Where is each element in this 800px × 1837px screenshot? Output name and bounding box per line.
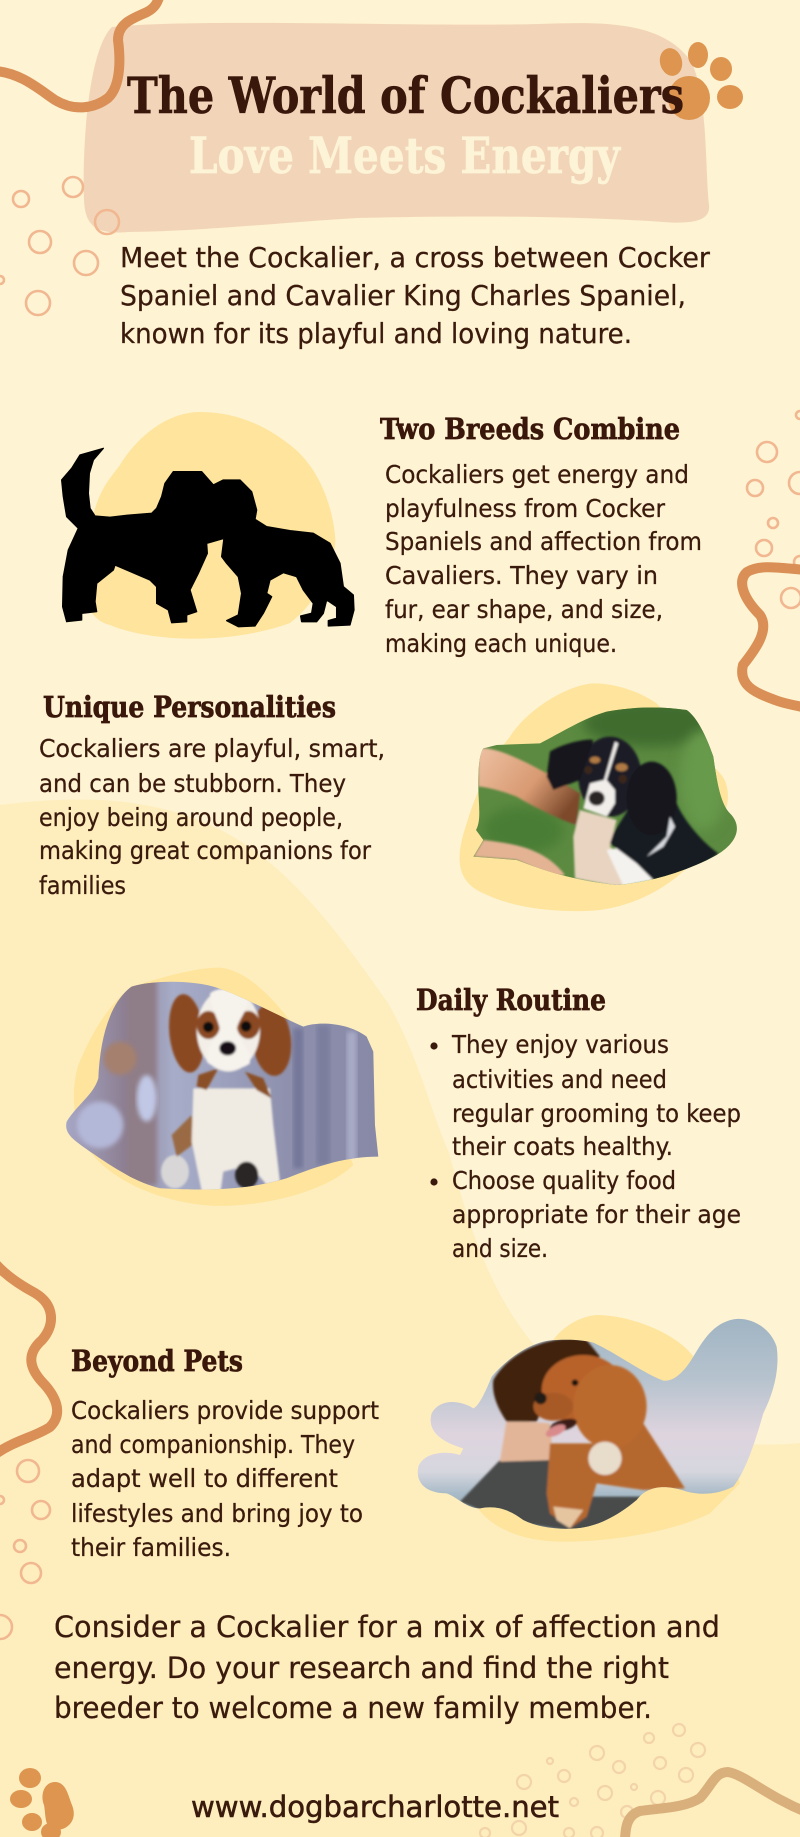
closing text: breeder to welcome a new family member.	[54, 1691, 652, 1725]
yellow blob behind photo	[477, 1315, 740, 1542]
body text: Cockaliers are playful, smart,	[39, 734, 385, 763]
decorative rings lower left	[0, 1460, 50, 1639]
heading: Unique Personalities	[43, 690, 336, 724]
yellow blob behind photo	[74, 968, 353, 1206]
body text: adapt well to different	[71, 1464, 338, 1493]
yellow blob behind photo	[460, 683, 728, 911]
body text	[39, 734, 385, 900]
subtitle: Love Meets Energy	[189, 126, 622, 185]
decorative squiggle top left	[0, 0, 160, 107]
large pale yellow background shape	[0, 800, 800, 1837]
body text: fur, ear shape, and size,	[385, 595, 663, 624]
closing text: Consider a Cockalier for a mix of affection and	[54, 1610, 720, 1644]
decorative rings top left	[0, 177, 119, 315]
bullet list	[430, 1030, 741, 1263]
decorative rings right	[747, 411, 800, 608]
icon: paw print top right	[657, 42, 743, 120]
body text	[71, 1396, 379, 1562]
closing text	[54, 1610, 720, 1725]
decorative rings bottom right	[480, 1724, 705, 1837]
bullet list: Choose quality food	[452, 1166, 676, 1195]
title: The World of Cockaliers	[127, 66, 684, 125]
decorative squiggle left	[0, 1262, 57, 1455]
bullet list: They enjoy various	[451, 1030, 669, 1059]
body text: and can be stubborn. They	[39, 769, 346, 798]
body text: Spaniels and affection from	[385, 527, 702, 556]
body text: and companionship. They	[71, 1430, 355, 1459]
body text: enjoy being around people,	[39, 803, 343, 832]
body text: Cockaliers get energy and	[385, 460, 689, 489]
panel: unique personalities	[39, 683, 747, 911]
closing text: energy. Do your research and find the right	[54, 1651, 669, 1685]
body text: making great companions for	[39, 836, 372, 865]
panel: two breeds combine	[62, 412, 702, 658]
body text: Cavaliers. They vary in	[385, 561, 658, 590]
bullet list: and size.	[452, 1234, 548, 1263]
panel: beyond pets	[71, 1313, 785, 1562]
body text: their families.	[71, 1533, 231, 1562]
icon: two dog silhouettes	[62, 448, 354, 627]
body text: families	[39, 871, 126, 900]
body text: lifestyles and bring joy to	[71, 1499, 363, 1528]
bullet list: their coats healthy.	[452, 1132, 673, 1161]
intro text: known for its playful and loving nature.	[120, 317, 632, 350]
decorative squiggle right	[742, 567, 800, 708]
icon: paw print bottom left	[10, 1768, 74, 1837]
body text: playfulness from Cocker	[385, 494, 666, 523]
bullet list: activities and need	[452, 1065, 667, 1094]
decorative squiggle bottom right	[625, 1772, 800, 1837]
intro text	[120, 241, 711, 350]
intro text: Meet the Cockalier, a cross between Cocker	[120, 241, 711, 274]
body text: Cockaliers provide support	[71, 1396, 379, 1425]
panel: daily routine	[60, 968, 741, 1263]
intro text: Spaniel and Cavalier King Charles Spaniel,	[120, 279, 686, 312]
bullet list: appropriate for their age	[452, 1200, 741, 1229]
photo: cavalier puppy against wood	[60, 975, 385, 1195]
heading: Beyond Pets	[71, 1344, 243, 1378]
yellow blob behind silhouette	[84, 412, 335, 639]
bullet list: regular grooming to keep	[452, 1099, 741, 1128]
body text	[385, 460, 702, 658]
heading: Daily Routine	[416, 983, 606, 1017]
body text: making each unique.	[385, 629, 617, 658]
photo: man hugging golden puppy	[410, 1313, 785, 1533]
photo: black and white puppy on grass	[473, 708, 737, 885]
title banner blob	[84, 23, 709, 233]
heading: Two Breeds Combine	[380, 412, 680, 446]
website url: www.dogbarcharlotte.net	[191, 1790, 559, 1824]
